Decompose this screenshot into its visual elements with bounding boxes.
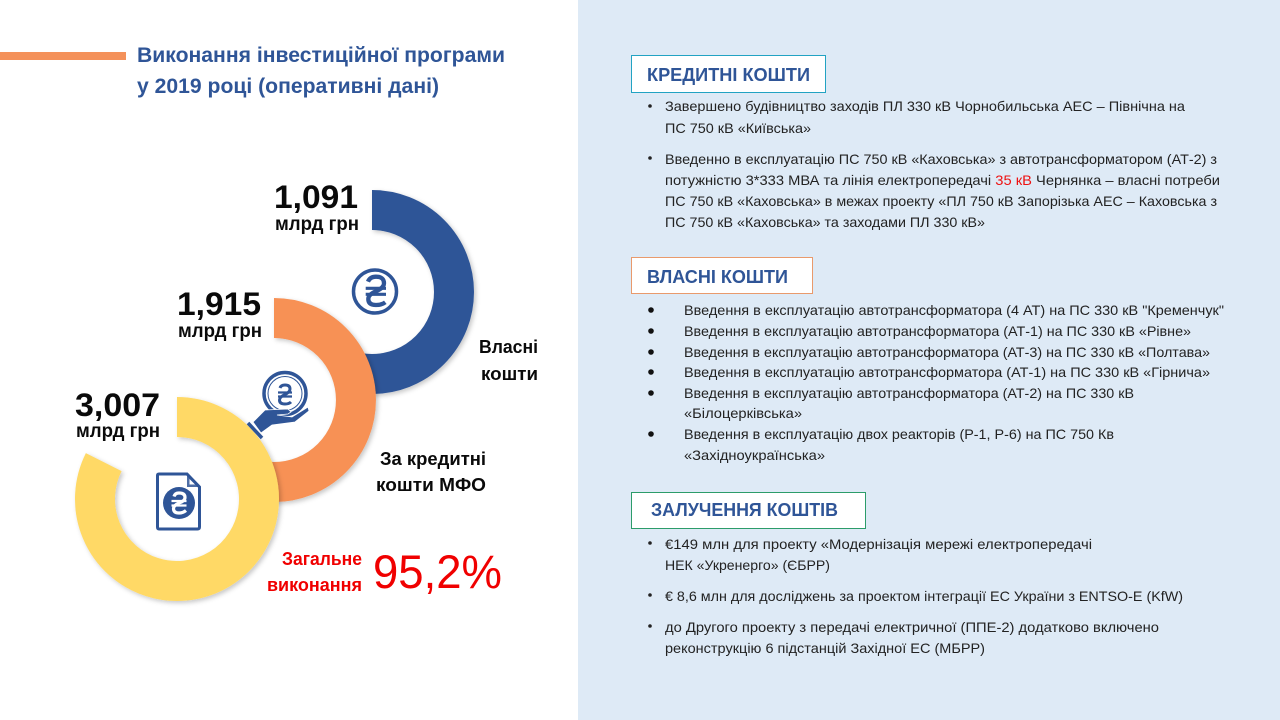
list: own funds: Введення в експлуатацію автотрансформатора (АТ-2) на ПС 330 кВ <box>684 385 1134 401</box>
title: у 2019 році (оперативні дані) <box>137 75 439 98</box>
label: total execution <box>267 549 362 595</box>
ring: IFI credit funds <box>260 318 356 482</box>
label: own funds: кошти <box>481 364 538 384</box>
list: own funds: «Білоцерківська» <box>684 405 802 421</box>
ring: total <box>95 417 259 581</box>
list: own funds: Введення в експлуатацію автотрансформатора (АТ-1) на ПС 330 кВ «Гірнича» <box>684 364 1210 380</box>
list: own funds: «Західноукраїнська» <box>684 447 825 463</box>
value: total: млрд грн <box>76 421 160 442</box>
list: raising funds: НЕК «Укренерго» (ЄБРР) <box>665 557 830 573</box>
list: raising funds: реконструкцію 6 підстанцій Західної ЕС (МБРР) <box>665 640 985 656</box>
value: credit funds: 1,915 <box>177 286 261 322</box>
value: total <box>75 387 160 442</box>
value: own funds: 1,091 <box>274 179 358 215</box>
label: own funds: Власні <box>479 337 538 357</box>
accent bar <box>0 52 126 60</box>
list: credit funds: ПС 750 кВ «Київська» <box>665 120 811 136</box>
list: credit funds: Завершено будівництво заходів ПЛ 330 кВ Чорнобильська АЕС – Північна на <box>665 98 1185 114</box>
panel: right background <box>578 0 1280 720</box>
label: credit funds: За кредитні <box>380 449 486 469</box>
icon: hryvnia coin <box>354 270 396 313</box>
value: credit funds: млрд грн <box>178 321 262 342</box>
list: credit funds: ПС 750 кВ «Каховська» в межах проекту «ПЛ 750 кВ Запорізька АЕС – Каховська з <box>665 193 1217 209</box>
title <box>137 44 505 98</box>
list: own funds: Введення в експлуатацію автотрансформатора (АТ-1) на ПС 330 кВ «Рівне» <box>684 323 1191 339</box>
section: raising funds <box>632 492 1183 656</box>
list: own funds: Введення в експлуатацію двох реакторів (Р-1, Р-6) на ПС 750 Кв <box>684 426 1114 442</box>
heading: own funds <box>632 258 812 294</box>
list: credit funds <box>648 98 1220 230</box>
section: own funds <box>632 258 1224 463</box>
value: credit funds <box>177 286 262 342</box>
ring: own funds <box>358 210 454 374</box>
list: raising funds: €149 млн для проекту «Модернізація мережі електропередачі <box>665 536 1092 552</box>
list: raising funds: до Другого проекту з передачі електричної (ППЕ-2) додатково включено <box>665 619 1159 635</box>
list: credit funds: ПС 750 кВ «Каховська» та заходами ПЛ 330 кВ» <box>665 214 985 230</box>
label: own funds <box>479 337 538 384</box>
list: credit funds: потужністю 3*333 МВА та лінія електропередачі 35 кВ Чернянка – власні потреби <box>665 172 1220 188</box>
ring chart: three funding rings <box>95 210 454 581</box>
heading: own funds: ВЛАСНІ КОШТИ <box>647 267 788 287</box>
section: credit funds <box>632 56 1220 230</box>
list: own funds: Введення в експлуатацію автотрансформатора (АТ-3) на ПС 330 кВ «Полтава» <box>684 344 1210 360</box>
label: total execution: Загальне <box>282 549 362 569</box>
list: credit funds: Введенно в експлуатацію ПС 750 кВ «Каховська» з автотрансформатором (АТ-2) з <box>665 151 1217 167</box>
value: 95,2%: 95,2% <box>373 545 502 598</box>
value: own funds: млрд грн <box>275 214 359 235</box>
title: Виконання інвестиційної програми <box>137 44 505 67</box>
icon: hand holding coin <box>248 372 309 438</box>
heading: raising funds: ЗАЛУЧЕННЯ КОШТІВ <box>651 500 838 520</box>
list: own funds <box>648 302 1224 463</box>
value: total: 3,007 <box>75 387 160 423</box>
list: raising funds: € 8,6 млн для досліджень за проектом інтеграції ЕС України з ENTSO-E (KfW) <box>665 588 1183 604</box>
heading: credit funds <box>632 56 826 92</box>
label: credit funds: кошти МФО <box>376 475 486 495</box>
list: own funds: Введення в експлуатацію автотрансформатора (4 АТ) на ПС 330 кВ "Кременчук" <box>684 302 1224 318</box>
icon: document with hryvnia <box>158 474 200 529</box>
value: own funds <box>274 179 359 235</box>
label: total execution: виконання <box>267 575 362 595</box>
heading: credit funds: КРЕДИТНІ КОШТИ <box>647 65 810 85</box>
heading: raising funds <box>632 492 866 528</box>
label: credit funds <box>376 449 486 495</box>
list: raising funds <box>648 536 1183 656</box>
